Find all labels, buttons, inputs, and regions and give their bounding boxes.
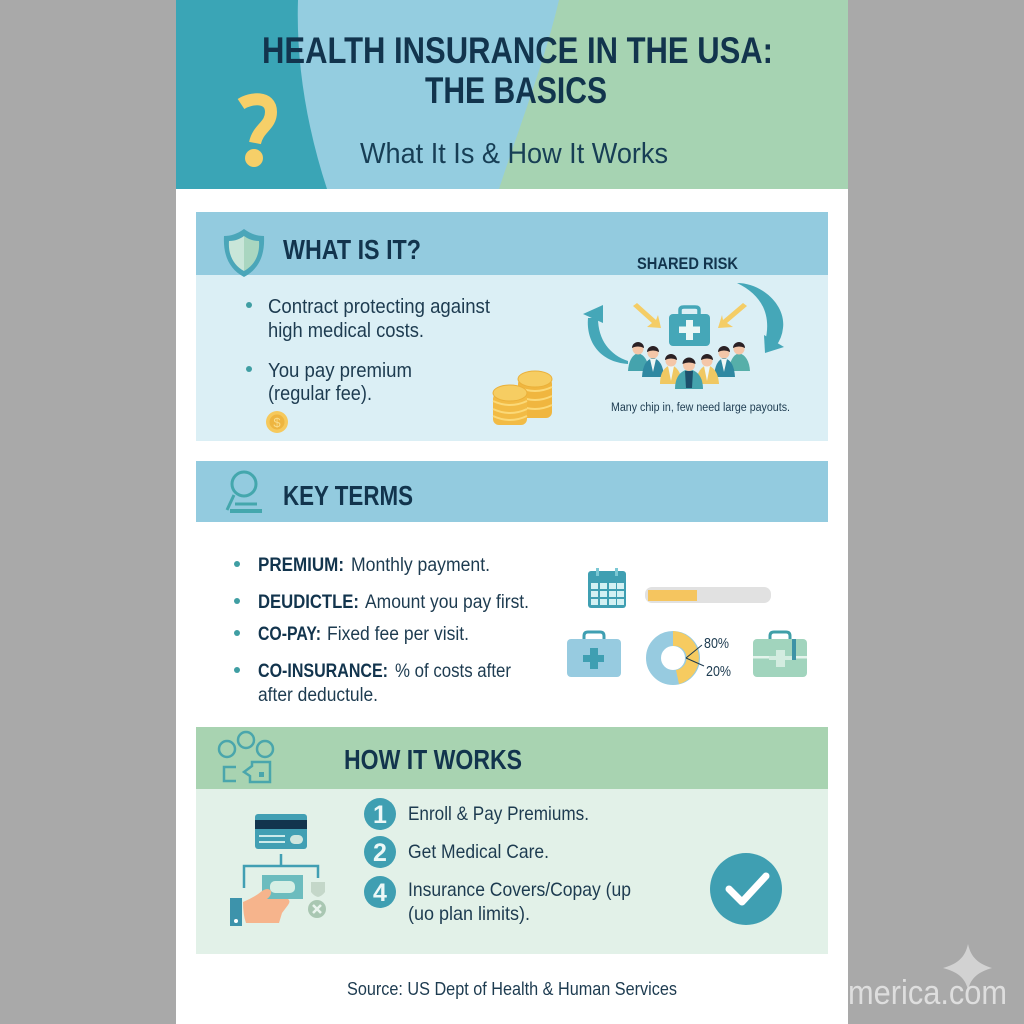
term list: CO-PAY: xyxy=(258,624,321,645)
term list xyxy=(234,555,529,706)
icon: shield xyxy=(224,229,264,277)
arrows: yellow contributions xyxy=(633,303,747,328)
icon: blue medical case xyxy=(567,632,621,677)
watermark xyxy=(848,944,1007,1012)
title: THE BASICS xyxy=(425,70,607,111)
term list: PREMIUM: xyxy=(258,555,344,576)
heading: key terms: KEY TERMS xyxy=(283,480,413,511)
icon: green medical case xyxy=(753,632,807,677)
title: HEALTH INSURANCE IN THE USA: xyxy=(262,30,773,71)
donut chart xyxy=(654,631,731,684)
icon: bill in hand xyxy=(230,875,303,926)
donut chart: 20% xyxy=(706,663,731,680)
term list: DEUDICTLE: xyxy=(258,592,359,613)
term list: after deductule. xyxy=(258,685,378,706)
icon: calendar xyxy=(588,568,626,608)
icon: question mark xyxy=(241,99,271,167)
bullet list: definition: You pay premium xyxy=(268,360,412,382)
source line: Source: US Dept of Health & Human Services xyxy=(347,978,677,999)
group of people xyxy=(628,342,750,389)
icon: process network xyxy=(219,732,273,782)
panel: key terms xyxy=(196,461,828,706)
donut chart: 80% xyxy=(704,635,729,652)
numbered steps: Get Medical Care. xyxy=(408,841,549,863)
heading: what is it: WHAT IS IT? xyxy=(283,234,421,265)
heading: shared risk: SHARED RISK xyxy=(637,254,739,273)
header banner xyxy=(176,0,848,189)
panel: what is it xyxy=(196,212,828,441)
numbered steps: 2 xyxy=(373,839,387,867)
icon: denied badge xyxy=(308,900,326,918)
term list: CO-INSURANCE: xyxy=(258,661,388,682)
icon: coin stacks xyxy=(493,371,552,425)
term list: Amount you pay first. xyxy=(365,592,529,613)
heading: how it works: HOW IT WORKS xyxy=(344,744,522,775)
subtitle: What It Is & How It Works xyxy=(360,138,668,170)
term list: % of costs after xyxy=(395,661,512,682)
bullet list: definition: Contract protecting against xyxy=(268,296,490,318)
numbered steps: 4 xyxy=(373,879,387,907)
icon: magnifier xyxy=(227,472,262,511)
panel: how it works xyxy=(196,727,828,954)
numbered steps: Enroll & Pay Premiums. xyxy=(408,803,589,825)
bullet list: definition xyxy=(246,296,490,405)
flow connector xyxy=(244,854,318,888)
icon: check mark xyxy=(710,853,782,925)
numbered steps: (uo plan limits). xyxy=(408,903,530,925)
title xyxy=(262,30,773,111)
arrow: left cycle xyxy=(583,305,628,364)
icon: small shield xyxy=(311,882,325,897)
term list: Fixed fee per visit. xyxy=(327,624,469,645)
icon: credit card xyxy=(255,814,307,849)
bullet list: definition: (regular fee). xyxy=(268,383,372,405)
bullet list: definition: high medical costs. xyxy=(268,320,424,342)
caption: shared risk: Many chip in, few need large payouts. xyxy=(611,402,790,414)
numbered steps: Insurance Covers/Copay (up xyxy=(408,879,631,901)
watermark: merica.com xyxy=(848,974,1007,1012)
numbered steps xyxy=(364,798,631,925)
term list: Monthly payment. xyxy=(351,555,490,576)
deductible progress bar xyxy=(645,587,771,603)
numbered steps: 1 xyxy=(373,801,387,829)
icon: small coin: $ xyxy=(273,415,281,430)
arrow: right cycle xyxy=(737,283,784,353)
icon: small coin xyxy=(266,411,288,433)
icon: medical case xyxy=(669,307,710,346)
